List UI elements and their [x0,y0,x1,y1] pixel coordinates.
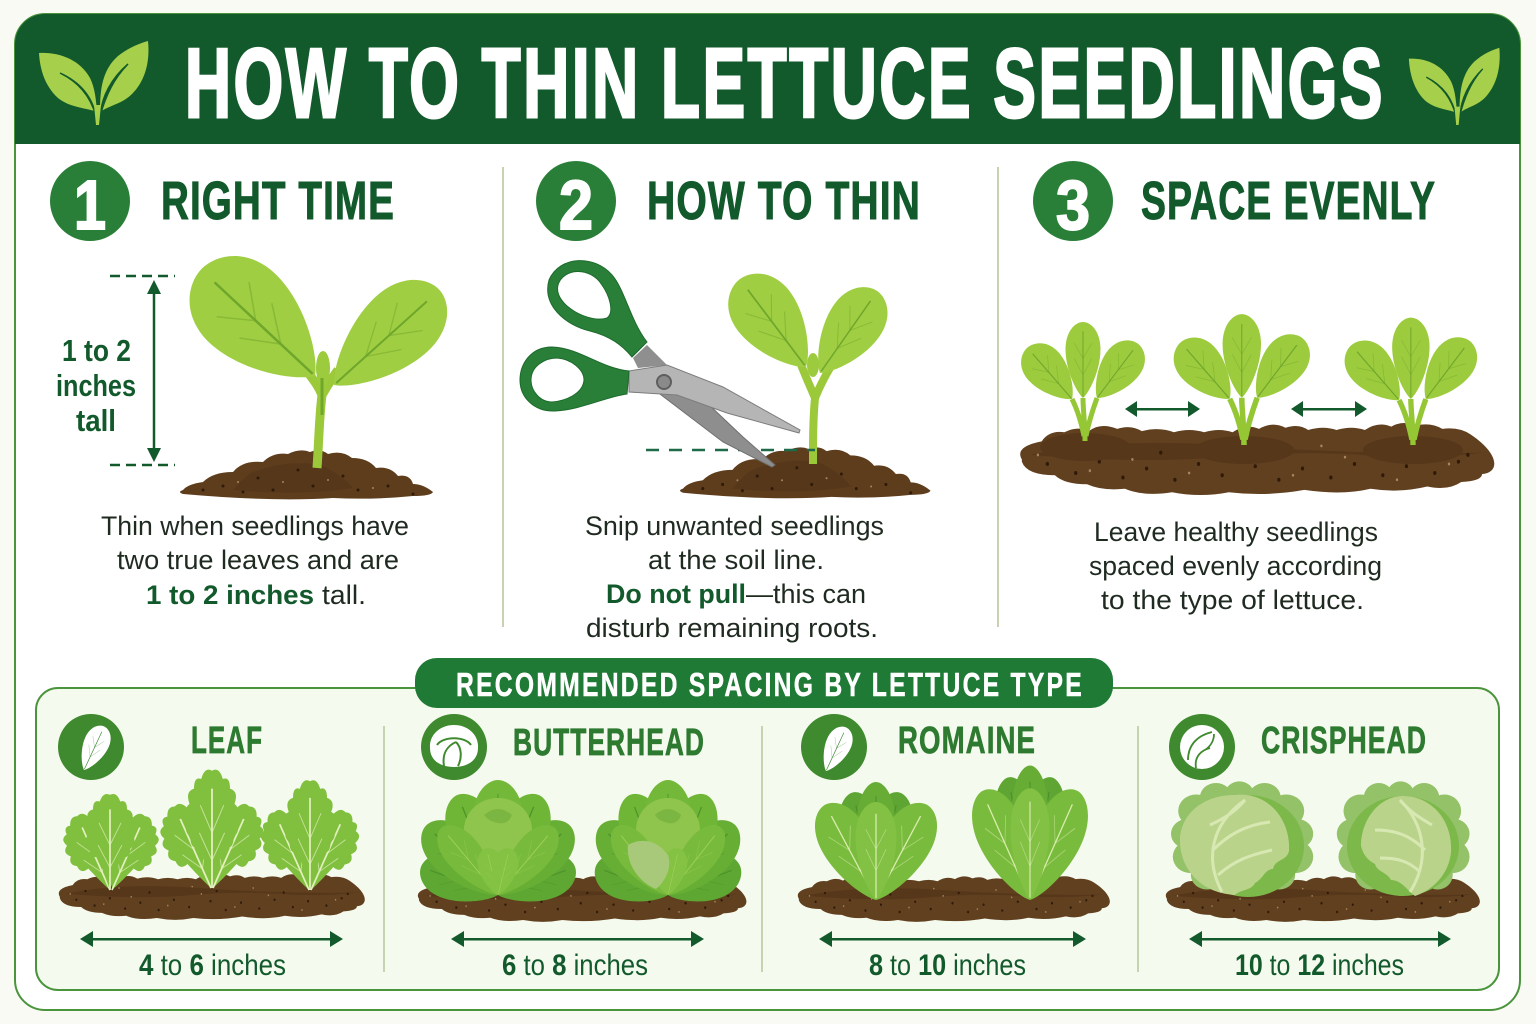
arrow: leaf spacing [80,931,343,947]
step 2 text: disturb remaining roots. [586,613,878,643]
icon: left header sprout [39,41,148,125]
step 3 badge [1033,161,1113,244]
butterhead spacing value: 6 to 8 inches [502,949,648,982]
butterhead label: BUTTERHEAD [513,722,705,764]
card: crisphead [1166,714,1480,982]
soil line [646,449,815,451]
step 3 text [1089,517,1382,615]
step 2 text: Do not pull [606,579,746,609]
step 1 badge [50,161,130,244]
arrow: butterhead spacing [451,931,704,947]
step 2 badge [536,161,616,244]
icon: crisphead [1169,714,1235,780]
header banner [15,14,1520,144]
seedling with soil [680,260,930,498]
crisphead label: CRISPHEAD [1261,720,1427,762]
step 2 heading: HOW TO THIN [647,171,921,231]
icon: scissors [520,261,800,467]
step 1 text [101,511,409,610]
icon: right header sprout [1409,48,1500,125]
leaf spacing value: 4 to 6 inches [139,949,286,982]
height label: 1 to 2 [62,333,131,368]
romaine label: ROMAINE [898,720,1036,762]
step 1 text: Thin when seedlings have [101,511,409,541]
step 2 text: —this can [746,579,866,609]
step 1 heading: RIGHT TIME [161,171,395,231]
step 2 badge: 2 [559,166,593,244]
panel: spacing by type [36,658,1499,990]
leaf lettuce plants [54,770,369,920]
spacing panel background [36,688,1499,990]
card: romaine [798,714,1110,982]
step 1 badge: 1 [74,166,106,244]
leaf label: LEAF [191,720,263,762]
butterhead plants [409,780,751,922]
card: leaf [54,714,369,982]
height dimension arrow [110,276,175,465]
panel: step 3 [1012,161,1494,615]
card: butterhead [409,714,751,982]
height label: inches [56,368,136,403]
panel: step 1 [50,161,465,610]
icon: romaine [801,714,867,780]
step 3 text: Leave healthy seedlings [1094,517,1378,547]
icon: leaf [58,714,124,780]
arrow: spacing left [1125,401,1200,417]
spacing banner: RECOMMENDED SPACING BY LETTUCE TYPE [456,666,1084,703]
panel: step 2 [520,161,930,643]
icon: butterhead [421,714,487,780]
step 3 text: spaced evenly according [1089,551,1382,581]
crisphead spacing value: 10 to 12 inches [1235,949,1404,982]
step 1 text: 1 to 2 inches [146,580,314,610]
step 2 text: Snip unwanted seedlings [585,511,884,541]
step 2 text: at the soil line. [648,545,824,575]
crisphead plants [1166,781,1480,922]
arrow: spacing right [1291,401,1367,417]
spacing banner [415,658,1113,708]
step 3 text: to the type of lettuce. [1101,585,1364,615]
seedling illustration [168,235,465,499]
soil row with three seedlings [1012,314,1494,495]
romaine plants [798,765,1110,922]
arrow: romaine spacing [819,931,1086,947]
romaine spacing value: 8 to 10 inches [869,949,1026,982]
step 1 text: two true leaves and are [117,545,399,575]
step 2 text [585,511,884,643]
step 1 text: tall. [322,580,366,610]
step 3 badge: 3 [1056,166,1090,244]
height label [56,333,136,438]
arrow: crisphead spacing [1189,931,1451,947]
divider [503,167,998,627]
height label: tall [76,403,116,438]
